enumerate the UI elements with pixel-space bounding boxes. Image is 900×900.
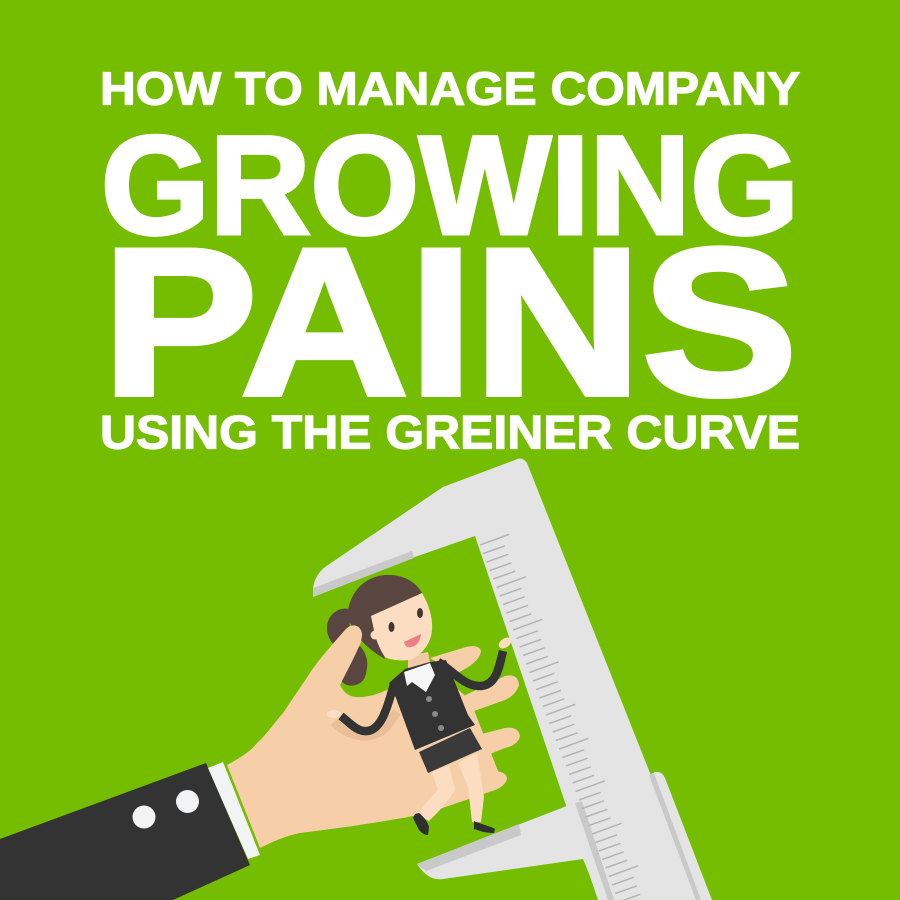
collar [404, 663, 435, 692]
finger [425, 771, 507, 814]
hair [348, 575, 422, 659]
heading line: how to manage company: HOW TO MANAGE COMPANY [100, 62, 800, 114]
illustration: caliper measuring woman in hand [0, 459, 712, 900]
hand left [327, 710, 341, 718]
jacket buttons [426, 696, 444, 731]
eye [388, 622, 394, 632]
heading line: pains: PAINS [102, 204, 797, 440]
shoes [413, 813, 495, 835]
legs [418, 753, 484, 822]
neck [408, 652, 431, 676]
hand [227, 630, 520, 848]
mouth [404, 634, 421, 647]
ear [370, 630, 380, 640]
caliper [313, 459, 712, 900]
sleeve button [176, 790, 199, 813]
arm shadow [334, 712, 397, 736]
heading line: growing: GROWING [101, 106, 799, 264]
slider left edge [575, 801, 614, 900]
title [100, 62, 800, 458]
slider right edge [649, 773, 701, 900]
lower jaw and slider [417, 772, 712, 900]
thumb [310, 625, 362, 685]
ponytail [327, 609, 367, 686]
jacket [389, 660, 475, 750]
upper jaw and beam [313, 459, 712, 900]
cuff [208, 762, 260, 859]
ruler ticks [480, 534, 640, 900]
finger [470, 728, 520, 762]
arms [341, 651, 503, 731]
sleeve [0, 763, 250, 900]
palm [227, 630, 500, 848]
woman [327, 575, 513, 835]
finger [445, 675, 519, 716]
finger [430, 646, 481, 674]
heading line: using the greiner curve: USING THE GREINER CURVE [100, 406, 800, 458]
hand right [497, 635, 513, 651]
sleeve button [132, 806, 156, 828]
upper jaw shadow [313, 551, 414, 597]
face [371, 593, 432, 660]
lower jaw shadow [417, 824, 521, 871]
eye [417, 608, 423, 618]
skirt [419, 728, 482, 773]
